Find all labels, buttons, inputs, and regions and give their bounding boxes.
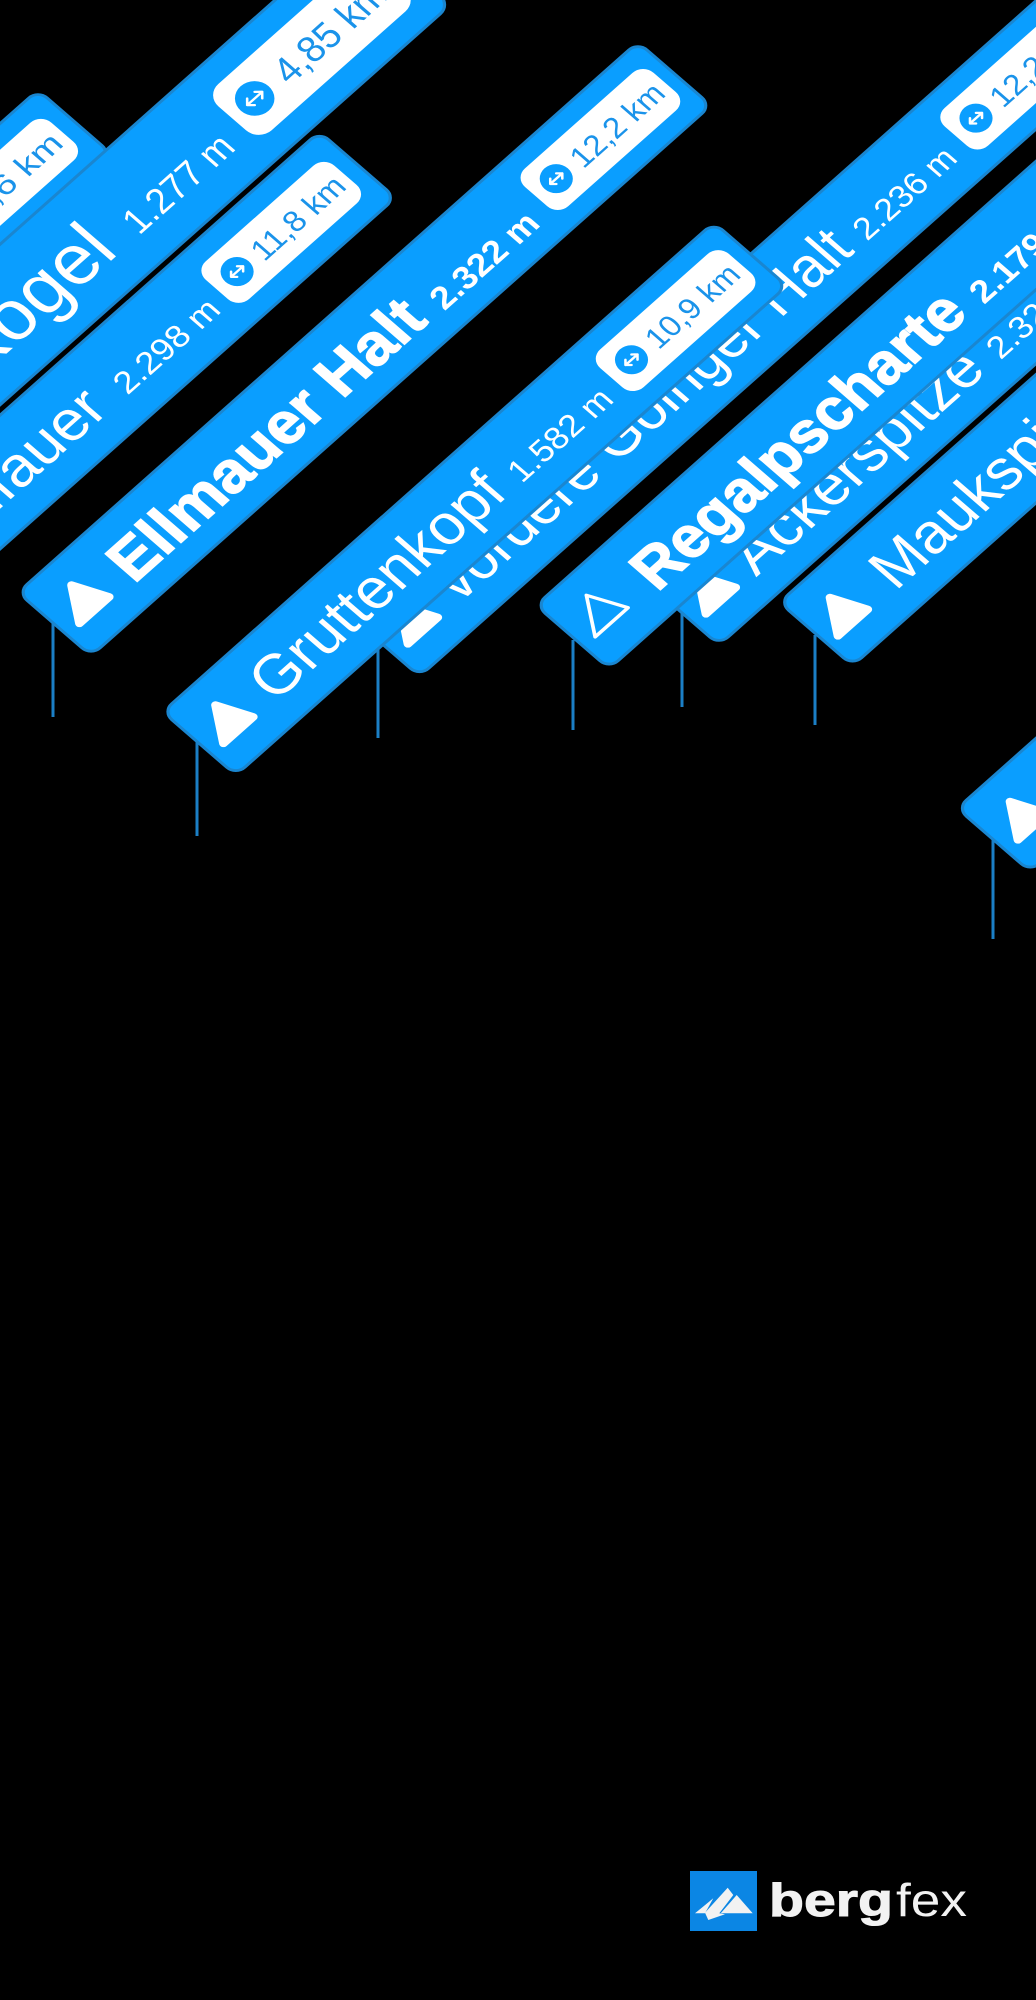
- sign: Ellmauer Halt: 2.322 m: [422, 205, 548, 317]
- sign: Gruttenkopf: 10,9 km: [637, 258, 748, 355]
- pole: Ellmauer Halt: [52, 620, 54, 717]
- sign: Regalpscharte: Regalpscharte: [616, 279, 980, 601]
- sign: Gruttenkopf: Gruttenkopf: [233, 459, 519, 711]
- logo mark: [690, 1871, 757, 1931]
- sign: far left, partly cropped: [0, 90, 111, 487]
- sign: Ackerspitze: Ackerspitze: [714, 335, 998, 586]
- pole: Ackerspitze: [680, 610, 684, 707]
- sign: far right, cropped: [957, 541, 1036, 872]
- sign: Ellmauer Halt: 12,2 km: [562, 77, 672, 174]
- sign: Regalpscharte: [536, 8, 1036, 669]
- sign: Treffauer: 2.298 m: [105, 292, 229, 401]
- sign: Treffauer: [0, 132, 396, 730]
- logo wordmark: berg: berg: [769, 1874, 893, 1926]
- sign: Gruttenkopf: 1.582 m: [500, 382, 621, 489]
- sign: vordere Goinger Halt: 2.236 m: [845, 141, 965, 247]
- sign: Ackerspitze: [646, 49, 1036, 645]
- logo wordmark: fex: fex: [896, 1874, 967, 1926]
- sign: Kogel: 1.277 m: [113, 126, 244, 242]
- sign: Ellmauer Halt: Ellmauer Halt: [92, 286, 439, 593]
- sign: Ellmauer Halt: [18, 42, 711, 656]
- sign: Gruttenkopf: [163, 222, 787, 775]
- sign: Treffauer: 11,8 km: [243, 169, 353, 267]
- sign: vordere Goinger Halt: vordere Goinger Halt: [418, 215, 866, 612]
- sign: vordere Goinger Halt: [346, 0, 1036, 676]
- logo: bergfex: [690, 1871, 967, 1931]
- pole: far right sign: [992, 840, 994, 939]
- sign: Maukspitze: [779, 71, 1036, 666]
- pole: Gruttenkopf: [196, 740, 198, 836]
- sign: Kogel: [0, 0, 451, 669]
- pole: Maukspitze: [814, 635, 816, 725]
- pole: Regalpscharte: [572, 640, 574, 730]
- pole: vordere Goinger Halt: [376, 640, 380, 738]
